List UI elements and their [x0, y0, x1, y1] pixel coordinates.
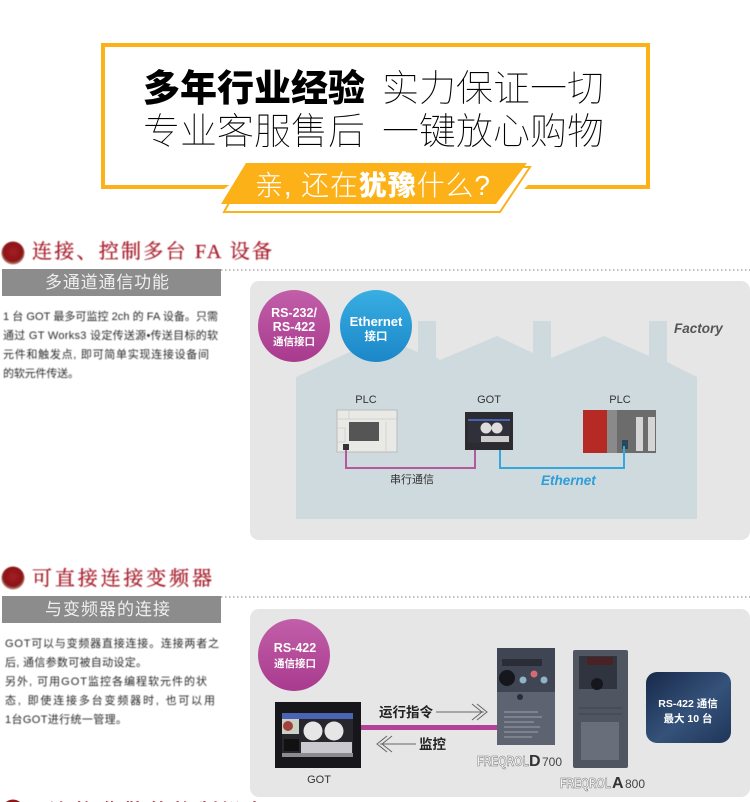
section heading: clipped at page bottom [2, 800, 267, 802]
badge: Ethernet: 接口 [364, 329, 388, 343]
GOT [465, 394, 513, 450]
section heading: inverter connection: 可直接连接变频器 [32, 567, 212, 590]
badge: RS-232/RS-422: RS-422 [273, 320, 315, 334]
run command arrow: 运行指令 [379, 704, 433, 720]
description text two: 后, 通信参数可被自动设定。 [5, 655, 147, 669]
badge: RS-422 [258, 619, 330, 691]
inverter D700 label: 700 [542, 755, 562, 769]
link cable [361, 725, 497, 730]
banner [103, 45, 648, 212]
description text two: 另外, 可用GOT监控各编程软元件的状 [5, 674, 207, 688]
title line two: 专业客服售后 一键放心购物 [143, 111, 604, 152]
serial label: 串行通信 [390, 473, 434, 486]
callout: up to 10 units: 最大 10 台 [663, 712, 713, 725]
PLC right [583, 394, 656, 453]
inverter D700 [497, 648, 555, 745]
description text two: 态, 即使连接多台变频器时, 也可以用 [5, 693, 215, 707]
badge: RS-232/RS-422: RS-232/ [271, 306, 317, 320]
inverter A800 label: A [612, 775, 624, 792]
badge: RS-422: RS-422 [274, 641, 316, 655]
serial cable [346, 450, 475, 468]
description text one: 的软元件传送。 [3, 366, 79, 380]
description text two [5, 636, 219, 726]
title line one: 多年行业经验 实力保证一切 [143, 67, 604, 109]
red bullet [2, 566, 24, 590]
badge: RS-232/RS-422 [258, 290, 330, 362]
description text one [3, 309, 218, 380]
PLC left: PLC [355, 394, 377, 406]
red bullet [2, 800, 24, 802]
panel: factory network diagram [250, 281, 750, 540]
callout: up to 10 units: RS-422 通信 [658, 697, 718, 710]
GOT terminal [275, 702, 361, 786]
badge: RS-232/RS-422: 通信接口 [273, 335, 315, 348]
section heading: multi-device connection: 连接、控制多台 FA 设备 [32, 240, 272, 263]
run command arrow [379, 704, 487, 720]
subheading bar: inverter [2, 596, 221, 623]
ethernet label: Ethernet [541, 473, 596, 488]
ethernet cable [500, 446, 624, 468]
subheading bar: multi channel [2, 269, 221, 296]
call to action tag [221, 163, 530, 212]
callout: up to 10 units [646, 672, 731, 743]
inverter A800 label: FREQROL [560, 775, 611, 792]
factory silhouette [296, 321, 697, 519]
panel: inverter diagram [250, 609, 750, 797]
description text one: 元件和触发点, 即可简单实现连接设备间 [3, 347, 209, 361]
description text two: GOT可以与变频器直接连接。连接两者之 [5, 636, 219, 650]
inverter A800 [573, 650, 628, 768]
inverter D700 label: FREQROL [477, 753, 529, 770]
subheading bar: inverter: 与变频器的连接 [45, 600, 170, 619]
description text one: 1 台 GOT 最多可监控 2ch 的 FA 设备。只需 [3, 309, 218, 323]
PLC right: PLC [609, 394, 631, 406]
factory label: Factory [674, 321, 724, 336]
badge: Ethernet [340, 290, 412, 362]
yellow frame [103, 45, 648, 187]
inverter A800 label: 800 [625, 777, 645, 791]
inverter D700 label: D [529, 753, 541, 770]
monitor arrow: 监控 [419, 736, 446, 752]
badge: Ethernet: Ethernet [350, 314, 403, 329]
subheading bar: multi channel: 多通道通信功能 [45, 273, 169, 292]
badge: RS-422: 通信接口 [274, 657, 316, 670]
red bullet [2, 242, 24, 264]
PLC left [337, 394, 397, 452]
description text two: 1台GOT进行统一管理。 [5, 712, 127, 726]
monitor arrow [377, 736, 446, 752]
call to action tag: 亲, 还在犹豫什么? [255, 170, 490, 201]
description text one: 通过 GT Works3 设定传送源•传送目标的软 [3, 328, 218, 342]
GOT terminal: GOT [307, 774, 331, 786]
GOT: GOT [477, 394, 501, 406]
